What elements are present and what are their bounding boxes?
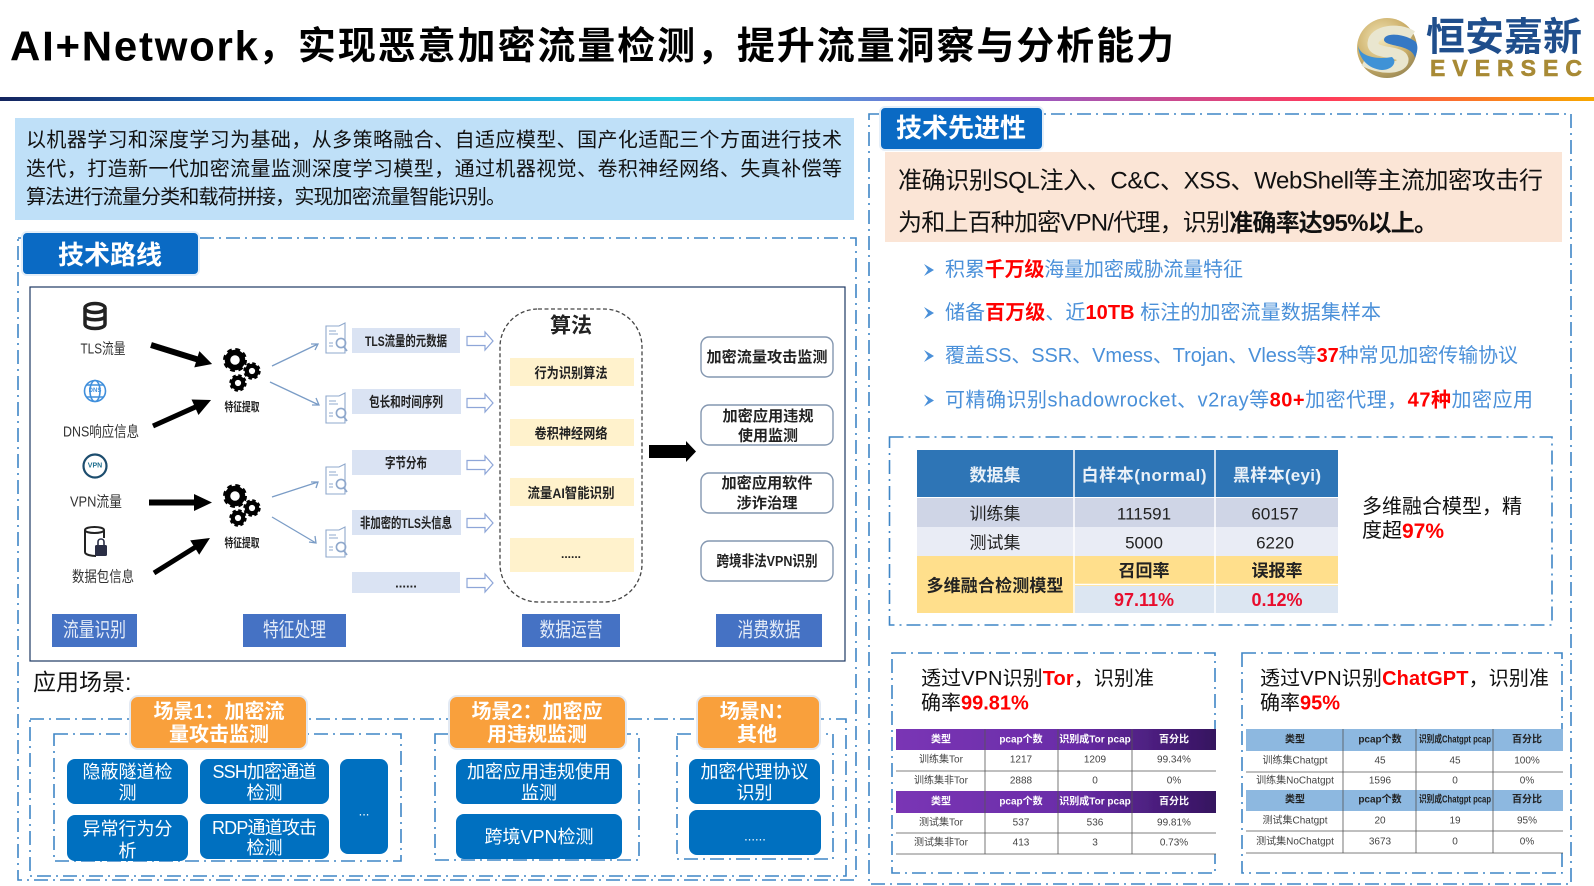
Tor table: 1209 <box>1084 754 1107 766</box>
ChatGPT table: 测试集NoChatgpt <box>1256 834 1334 848</box>
Tor table: 测试集非Tor <box>914 836 969 848</box>
dataset table: 60157 <box>1251 504 1299 524</box>
output labels: 涉诈治理 <box>736 494 798 512</box>
icons: document search <box>326 323 347 557</box>
box: proxy protocol <box>689 759 820 804</box>
Tor table: 3 <box>1092 838 1098 848</box>
Tor table: 识别成Tor pcap <box>1059 732 1131 746</box>
algorithm group: ...... <box>561 547 581 561</box>
header gradient rule <box>0 97 1594 101</box>
Tor table: 类型 <box>931 794 951 808</box>
scenario 2: 场景2：加密应 <box>471 699 603 723</box>
box: anomaly: 异常行为分 <box>82 819 172 839</box>
ChatGPT table: 测试集Chatgpt <box>1262 814 1328 826</box>
heading: technical roadmap <box>22 232 199 275</box>
output labels: 跨境非法VPN识别 <box>716 552 818 570</box>
ChatGPT table: pcap个数 <box>1358 792 1402 806</box>
Tor table: 百分比 <box>1159 732 1189 746</box>
label: TLS traffic: TLS流量 <box>80 340 126 358</box>
stage labels: 流量识别 <box>63 618 126 642</box>
model accuracy note: 度超97% <box>1362 519 1444 542</box>
callout: accuracy summary: 准确识别SQL注入、C&C、XSS、WebShell等主流加密攻击行 <box>898 168 1543 194</box>
scenarios outer frame <box>30 719 846 876</box>
dataset table: 97.11% <box>1114 590 1174 610</box>
ChatGPT table: 45 <box>1374 756 1386 766</box>
box: proxy protocol: 加密代理协议 <box>700 762 808 782</box>
scenario N <box>677 696 833 859</box>
Tor table: 99.34% <box>1157 754 1191 766</box>
bullet list <box>924 258 1533 412</box>
icon: locked data <box>85 527 107 556</box>
box: anomaly <box>67 815 188 861</box>
ChatGPT table: 识别成Chatgpt pcap <box>1419 732 1491 746</box>
dataset table: 黑样本(eyi) <box>1233 465 1321 485</box>
title: AI+Network <box>10 22 259 70</box>
stage labels: 消费数据 <box>738 618 800 642</box>
Tor table: 测试集Tor <box>919 816 964 828</box>
Tor heading: 透过VPN识别Tor，识别准 <box>921 667 1154 690</box>
Tor table: 0 <box>1092 776 1098 786</box>
dataset table: 测试集 <box>970 534 1020 552</box>
panel: technical advantages <box>869 107 1571 884</box>
icon: VPN badge <box>84 454 106 478</box>
heading: technical roadmap: 技术路线 <box>58 240 162 270</box>
Tor table: 537 <box>1013 818 1030 828</box>
arrows: thin feature arrows <box>270 344 319 543</box>
icon: VPN badge: VPN <box>88 462 102 470</box>
box: RDP: 检测 <box>246 838 282 858</box>
Tor table: 1217 <box>1010 754 1033 766</box>
Tor table: pcap个数 <box>999 794 1043 808</box>
algorithm group <box>500 309 642 602</box>
ChatGPT table: 识别成Chatgpt pcap <box>1419 792 1491 806</box>
box: SSH <box>200 759 329 804</box>
box: cross-border VPN <box>456 814 622 859</box>
ChatGPT heading <box>1260 667 1549 714</box>
panel: ChatGPT identification <box>1242 653 1563 873</box>
ChatGPT table: 95% <box>1517 816 1537 826</box>
box: more: ...... <box>744 828 766 844</box>
heading: technical advantages: 技术先进性 <box>896 113 1026 143</box>
ChatGPT table: 类型 <box>1285 792 1305 806</box>
output labels: 使用监测 <box>738 426 798 444</box>
ChatGPT table: 0 <box>1452 836 1458 848</box>
output boxes <box>701 337 833 581</box>
box: app violation: 监测 <box>521 783 557 803</box>
box: RDP <box>200 814 329 859</box>
box: proxy protocol: 识别 <box>736 783 772 803</box>
box: SSH: 检测 <box>246 783 282 803</box>
scenario 1: 量攻击监测 <box>169 723 269 746</box>
arrows: inputs to feature extraction <box>148 337 215 580</box>
Tor table: 训练集Tor <box>919 752 964 766</box>
box: more <box>689 810 821 855</box>
Tor table: 2888 <box>1010 776 1033 786</box>
ChatGPT table: 0 <box>1452 776 1458 786</box>
panel: multi-dimensional model <box>890 437 1552 625</box>
dataset table: 误报率 <box>1252 560 1302 580</box>
bullet list: 覆盖SS、SSR、Vmess、Trojan、Vless等37种常见加密传输协议 <box>945 344 1518 367</box>
Tor table: 识别成Tor pcap <box>1059 794 1131 808</box>
algorithm group: 算法 <box>550 314 592 338</box>
label: VPN traffic: VPN流量 <box>70 494 122 510</box>
box: cross-border VPN: 跨境VPN检测 <box>484 827 594 847</box>
callout: accuracy summary: 为和上百种加密VPN/代理，识别准确率达95%以上。 <box>898 210 1438 236</box>
icon: gears top <box>225 350 259 390</box>
dataset table: 白样本(normal) <box>1082 465 1206 485</box>
algorithm group: 卷积神经网络 <box>534 426 608 442</box>
ChatGPT table: 百分比 <box>1512 792 1542 806</box>
ChatGPT table: 训练集Chatgpt <box>1262 754 1328 766</box>
Tor table: 413 <box>1013 838 1030 848</box>
ChatGPT table: 0% <box>1520 776 1534 786</box>
dataset table: 6220 <box>1256 534 1294 552</box>
ChatGPT table: pcap个数 <box>1358 732 1402 746</box>
Tor heading <box>921 667 1154 714</box>
scenario N: 其他 <box>737 723 777 746</box>
output labels: 加密流量攻击监测 <box>706 348 828 366</box>
dataset table: 0.12% <box>1251 590 1303 610</box>
stage labels: 数据运营 <box>540 618 602 642</box>
intro text panel: 以机器学习和深度学习为基础，从多策略融合、自适应模型、国产化适配三个方面进行技术 <box>26 128 842 152</box>
ChatGPT table <box>1246 729 1563 853</box>
logo: EVERSEC <box>1357 16 1582 81</box>
feature labels: ...... <box>395 576 417 590</box>
Tor table: 训练集非Tor <box>914 774 969 786</box>
ChatGPT table: 类型 <box>1285 732 1305 746</box>
box: SSH: SSH加密通道 <box>212 762 316 782</box>
dataset table: 数据集 <box>970 465 1020 485</box>
dataset table: 5000 <box>1125 534 1163 552</box>
dataset table: 训练集 <box>970 504 1020 524</box>
dataset table <box>917 450 1338 613</box>
output labels: 加密应用违规 <box>722 407 814 425</box>
ChatGPT table: 45 <box>1449 756 1461 766</box>
feature labels: 字节分布 <box>385 455 427 471</box>
Tor table: 536 <box>1087 818 1104 828</box>
box: app violation: 加密应用违规使用 <box>467 762 611 782</box>
bullet list: 积累千万级海量加密威胁流量特征 <box>945 258 1243 281</box>
feature labels: 非加密的TLS头信息 <box>360 515 452 531</box>
algorithm group: 流量AI智能识别 <box>528 485 614 501</box>
ChatGPT table: 20 <box>1374 816 1386 826</box>
label: feature extraction top: 特征提取 <box>224 399 260 414</box>
ChatGPT table: 3673 <box>1369 836 1392 848</box>
panel: Tor identification <box>892 653 1216 873</box>
arrow: to consumers <box>649 441 696 462</box>
heading: application scenarios: 应用场景: <box>33 669 131 695</box>
box: covert tunnel <box>67 759 188 804</box>
icon: DNS globe: DNS <box>89 388 101 394</box>
stage labels <box>52 614 822 647</box>
output labels: 加密应用软件 <box>722 474 812 492</box>
Tor table: pcap个数 <box>999 732 1043 746</box>
Tor heading: 确率99.81% <box>921 692 1029 714</box>
arrows: hollow <box>467 332 493 592</box>
box: covert tunnel: 测 <box>118 783 136 803</box>
logo: EVERSEC: EVERSEC <box>1430 55 1582 81</box>
scenario 2: 用违规监测 <box>487 723 587 746</box>
ChatGPT table: 19 <box>1449 816 1461 826</box>
dataset table: 111591 <box>1117 504 1171 524</box>
ChatGPT heading: 透过VPN识别ChatGPT，识别准 <box>1260 667 1549 690</box>
scenario 1: 场景1：加密流 <box>153 699 285 723</box>
dataset table: 召回率 <box>1118 560 1170 580</box>
box: more <box>340 759 388 854</box>
icon: gears bottom <box>225 486 259 525</box>
label: DNS response: DNS响应信息 <box>63 422 139 440</box>
scenario 1 <box>54 696 401 861</box>
model accuracy note <box>1362 495 1522 542</box>
ChatGPT table: 1596 <box>1369 776 1392 786</box>
stage labels: 特征处理 <box>263 618 326 642</box>
ChatGPT heading: 确率95% <box>1260 692 1340 714</box>
scenario N: 场景N： <box>720 700 794 723</box>
Tor table: 百分比 <box>1159 794 1189 808</box>
panel: technical roadmap <box>18 232 856 880</box>
Tor table <box>896 729 1216 854</box>
ChatGPT table: 训练集NoChatgpt <box>1256 774 1334 786</box>
model accuracy note: 多维融合模型，精 <box>1362 495 1522 518</box>
feature labels: 包长和时间序列 <box>369 394 443 410</box>
feature labels <box>352 328 461 593</box>
intro text panel <box>15 118 854 220</box>
heading: technical advantages <box>880 107 1043 150</box>
logo: EVERSEC: 恒安嘉新 <box>1426 16 1582 60</box>
scenario 2 <box>435 696 639 860</box>
bullet list: 可精确识别shadowrocket、v2ray等80+加密代理，47种加密应用 <box>945 388 1533 412</box>
algorithm group: 行为识别算法 <box>534 365 608 381</box>
box: more: ... <box>359 804 369 818</box>
label: packet info: 数据包信息 <box>72 568 134 586</box>
title: ，实现恶意加密流量检测，提升流量洞察与分析能力 <box>258 26 1174 68</box>
ChatGPT table: 100% <box>1514 756 1540 766</box>
box: app violation <box>456 759 622 804</box>
Tor table: 0.73% <box>1160 838 1188 848</box>
Tor table: 0% <box>1167 776 1181 786</box>
roadmap diagram <box>30 287 845 661</box>
box: covert tunnel: 隐蔽隧道检 <box>82 762 172 782</box>
intro text panel: 算法进行流量分类和载荷拼接，实现加密流量智能识别。 <box>26 186 506 208</box>
bullet list: 储备百万级、近10TB 标注的加密流量数据集样本 <box>945 301 1381 324</box>
box: anomaly: 析 <box>118 841 136 861</box>
intro text panel: 迭代，打造新一代加密流量监测深度学习模型，通过机器视觉、卷积神经网络、失真补偿等 <box>26 158 842 180</box>
Tor table: 类型 <box>931 732 951 746</box>
icon: database <box>85 304 105 328</box>
callout: accuracy summary <box>885 152 1562 242</box>
Tor table: 99.81% <box>1157 818 1191 828</box>
feature labels: TLS流量的元数据 <box>365 333 447 349</box>
dataset table: 多维融合检测模型 <box>926 576 1064 596</box>
output labels <box>706 348 828 570</box>
ChatGPT table: 百分比 <box>1512 732 1542 746</box>
box: RDP: RDP通道攻击 <box>212 818 317 838</box>
icon: DNS globe <box>84 380 106 402</box>
ChatGPT table: 0% <box>1520 836 1534 848</box>
label: feature extraction bottom: 特征提取 <box>224 535 260 550</box>
